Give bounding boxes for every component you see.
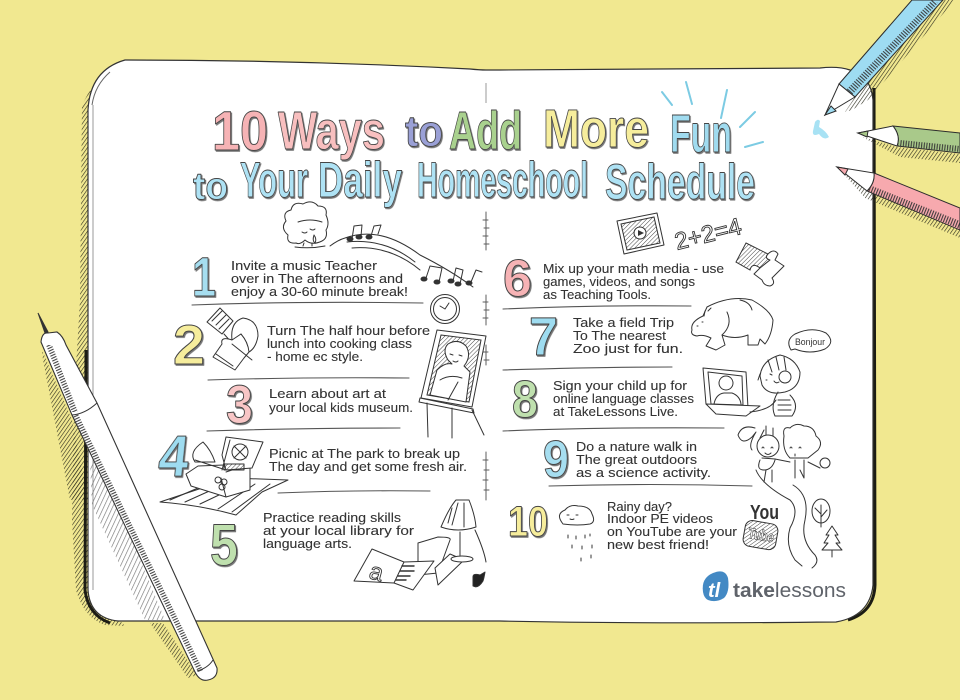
icon: 2+2=4: 2+2=4	[672, 213, 744, 256]
tip 8 text: Sign your child up for	[553, 378, 688, 393]
icon: singer with music notes	[283, 202, 482, 287]
title line 2	[193, 152, 755, 210]
tip 9 text: The great outdoors	[576, 452, 698, 467]
notebook centre binding marks	[483, 212, 489, 500]
tip 2 text: Turn The half hour before	[267, 323, 430, 338]
tip 5 text: language arts.	[263, 536, 352, 551]
pen lying across the notebook	[38, 313, 217, 680]
title	[193, 82, 763, 210]
logo blob	[703, 571, 728, 601]
tip 6 text: games, videos, and songs	[543, 274, 695, 289]
title line 1: 10	[212, 99, 268, 162]
tip 7 text	[573, 315, 683, 356]
pink pencil	[837, 167, 960, 238]
tip 10	[508, 498, 738, 552]
tip 5	[210, 510, 415, 578]
tip 1 text: enjoy a 30-60 minute break!	[231, 284, 408, 299]
tip 8 text: at TakeLessons Live.	[553, 404, 678, 419]
icon: portrait on easel	[419, 330, 486, 438]
logo mark letters: tl	[708, 580, 721, 602]
icon: clock	[430, 294, 460, 324]
icon: video player	[617, 213, 664, 254]
tip 7 text: To The nearest	[573, 328, 666, 343]
open notebook	[72, 60, 875, 626]
icon: laptop and girl with headphones	[703, 355, 800, 416]
tip 5 text: at your local library for	[263, 523, 415, 538]
title line 1: Add	[449, 101, 522, 161]
green pencil	[858, 126, 960, 163]
tip 1 text	[231, 258, 408, 299]
icon: books, lamp and apple: a	[366, 558, 387, 587]
tip 7 text: Zoo just for fun.	[573, 341, 683, 356]
icon: spatula and oven mitt	[207, 308, 258, 370]
title line 2: Your	[240, 152, 308, 208]
icon: rain cloud	[559, 506, 594, 561]
icon: Bonjour speech bubble: Bonjour	[795, 337, 825, 347]
icon: Bonjour speech bubble	[789, 330, 831, 352]
tip 4 text: Picnic at The park to break up	[269, 446, 460, 461]
number 4: 4	[156, 424, 193, 489]
tip 1 text: over in The afternoons and	[231, 271, 403, 286]
tip 3 text	[269, 386, 413, 415]
number 8: 8	[512, 371, 538, 429]
tip 7	[529, 307, 683, 367]
tip 9 text	[576, 439, 711, 480]
number 2: 2	[173, 313, 205, 376]
title line 1: Ways	[278, 101, 385, 161]
tip 2 text	[267, 323, 430, 364]
tip 10 text: on YouTube are your	[607, 524, 738, 539]
tip 5 text	[263, 510, 415, 551]
blue pencil	[813, 0, 955, 138]
tip 6 text: Mix up your math media - use	[543, 261, 724, 276]
icon: puzzle pieces	[736, 243, 784, 286]
icon: trees	[812, 499, 842, 557]
tip 7 text: Take a field Trip	[573, 315, 674, 330]
tip 6 text	[543, 261, 724, 302]
tip 2	[173, 313, 430, 376]
pen tip	[38, 313, 48, 333]
title line 2: to	[193, 166, 228, 208]
pen shadow	[42, 350, 88, 500]
number 5: 5	[210, 513, 238, 578]
number 10: 10	[508, 498, 548, 546]
tip 3	[226, 375, 413, 435]
tip 2 text: lunch into cooking class	[267, 336, 413, 351]
tip 9	[543, 431, 711, 489]
pen detail lines	[46, 345, 78, 412]
black spine edges	[85, 350, 110, 623]
title line 1: More	[543, 99, 649, 159]
dividers	[192, 302, 752, 493]
tip 6	[503, 250, 724, 308]
pen body	[41, 332, 217, 680]
tip 2 text: - home ec style.	[267, 349, 363, 364]
number 7: 7	[529, 307, 558, 367]
title line 2: Schedule	[605, 154, 755, 210]
number 1: 1	[192, 245, 216, 308]
tip 4 text	[269, 446, 467, 474]
tip 10 text	[607, 499, 738, 552]
logo wordmark: takelessons	[733, 579, 846, 602]
pages	[88, 60, 873, 623]
tip 9 text: Do a nature walk in	[576, 439, 697, 454]
book edge shadow	[72, 90, 125, 626]
number 9: 9	[543, 431, 569, 489]
icon: You Tube: Tube	[747, 525, 775, 546]
title line 1: Fun	[670, 104, 732, 164]
tip 10 text: Indoor PE videos	[607, 511, 714, 526]
tip 8 text: online language classes	[553, 391, 694, 406]
tip 6 text: as Teaching Tools.	[543, 287, 651, 302]
tip 8 text	[553, 378, 694, 419]
title line 2: Homeschool	[417, 152, 588, 208]
rays around Fun	[662, 82, 763, 147]
title line 1	[212, 99, 732, 164]
icon: books, lamp and apple	[354, 500, 486, 590]
title line 2: Daily	[318, 152, 402, 208]
icon: hippo	[692, 299, 773, 350]
tip 1	[192, 245, 408, 308]
icon: You Tube	[742, 502, 779, 551]
tip 10 text: new best friend!	[607, 537, 709, 552]
tip 9 text: as a science activity.	[576, 465, 711, 480]
tip 1 text: Invite a music Teacher	[231, 258, 378, 273]
tip 5 text: Practice reading skills	[263, 510, 402, 525]
icon: children walking on path	[738, 424, 830, 568]
tip 8	[512, 371, 694, 429]
tip 3 text: your local kids museum.	[269, 400, 413, 415]
number 6: 6	[503, 250, 532, 308]
takelessons logo	[703, 571, 846, 602]
title line 1: to	[405, 107, 443, 156]
tip 3 text: Learn about art at	[269, 386, 386, 401]
icon: picnic basket on blanket	[160, 437, 288, 515]
tip 4	[156, 424, 467, 489]
number 3: 3	[226, 375, 253, 435]
icon: You Tube: You	[750, 502, 779, 524]
tip 4 text: The day and get some fresh air.	[269, 459, 467, 474]
tip 10 text: Rainy day?	[607, 499, 672, 514]
